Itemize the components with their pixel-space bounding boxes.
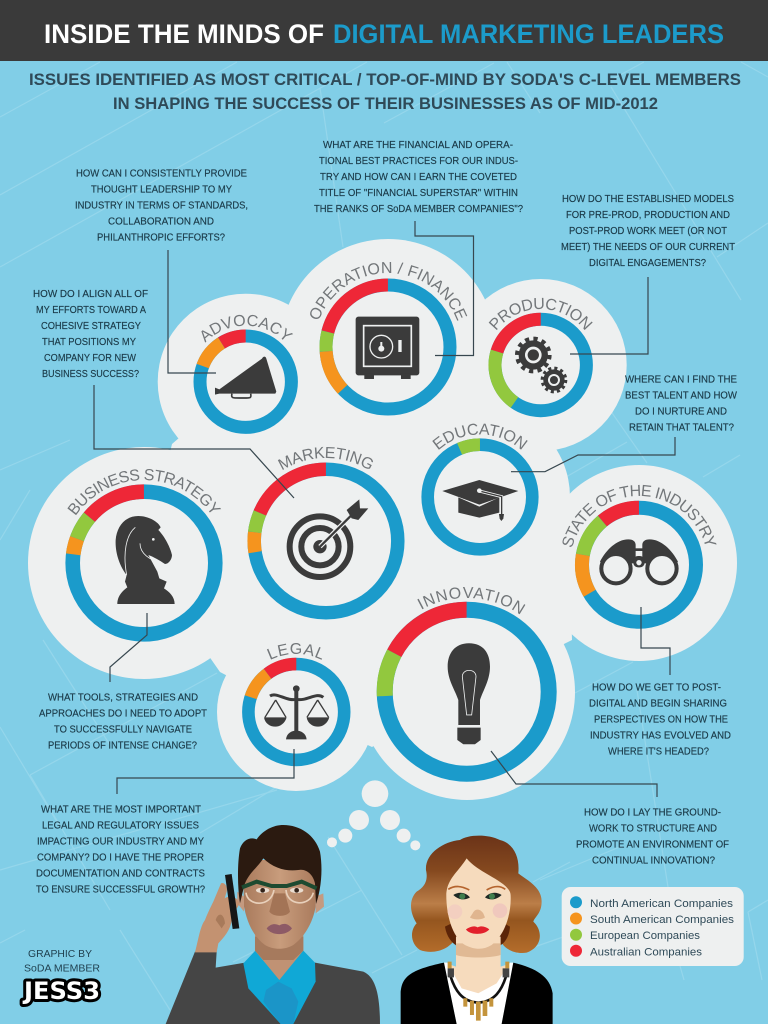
question: innovation: WORK TO STRUCTURE AND — [589, 824, 717, 834]
label: marketing: MARKETING — [278, 446, 373, 470]
subtitle: IN SHAPING THE SUCCESS OF THEIR BUSINESSES AS OF MID-2012 — [113, 95, 658, 113]
question: operation / finance: WHAT ARE THE FINANCIAL AND OPERA- — [323, 140, 513, 151]
question: production: POST-PROD WORK MEET (OR NOT — [569, 226, 727, 237]
question: advocacy — [75, 168, 248, 244]
question: operation / finance: TIONAL BEST PRACTICES FOR OUR INDUS- — [319, 156, 518, 167]
title: DIGITAL MARKETING LEADERS — [333, 19, 724, 49]
question: innovation: CONTINUAL INNOVATION? — [592, 856, 716, 866]
icon: target with arrow — [290, 499, 368, 577]
question: state of the industry: WHERE IT'S HEADED? — [608, 746, 710, 758]
icon: safe — [356, 317, 419, 379]
legend item: european: European Companies — [590, 930, 701, 942]
logo: JESS3: JESS3 — [22, 977, 100, 1005]
question: business strategy: TO SUCCESSFULLY NAVIGATE — [54, 724, 192, 736]
question: marketing: HOW DO I ALIGN ALL OF — [33, 289, 148, 300]
icon: graduation cap — [442, 480, 518, 521]
question: business strategy: PERIODS OF INTENSE CHANGE? — [48, 740, 198, 752]
question: education: WHERE CAN I FIND THE — [625, 374, 737, 386]
question: legal: LEGAL AND REGULATORY ISSUES — [42, 820, 199, 832]
question: marketing: BUSINESS SUCCESS? — [42, 369, 140, 380]
illustration: woman — [401, 836, 553, 1024]
question: production — [561, 194, 735, 269]
icon: light bulb — [448, 643, 490, 744]
question: education: RETAIN THAT TALENT? — [629, 422, 735, 434]
header bar — [0, 0, 768, 61]
subtitle: ISSUES IDENTIFIED AS MOST CRITICAL / TOP-OF-MIND BY SODA'S C-LEVEL MEMBERS — [29, 71, 741, 89]
label: legal: LEGAL — [267, 643, 322, 660]
question: innovation — [576, 808, 729, 866]
label: operation / finance: OPERATION / FINANCE — [310, 262, 468, 321]
question: education: DO I NURTURE AND — [635, 406, 727, 418]
question: legal: TO ENSURE SUCCESSFUL GROWTH? — [36, 884, 206, 896]
question: education: BEST TALENT AND HOW — [625, 390, 738, 402]
topic: advocacy — [194, 314, 298, 434]
question: operation / finance: THE RANKS OF SoDA MEMBER COMPANIES"? — [314, 204, 524, 215]
illustration: man on phone — [166, 825, 380, 1024]
thought bubbles — [327, 780, 420, 850]
label: education: EDUCATION — [432, 424, 528, 450]
label: business strategy: BUSINESS STRATEGY — [68, 469, 221, 515]
question: state of the industry: DIGITAL AND BEGIN SHARING — [589, 698, 727, 710]
topic: innovation — [376, 587, 557, 782]
question: state of the industry: PERSPECTIVES ON HOW THE — [594, 714, 728, 726]
question: business strategy: WHAT TOOLS, STRATEGIES AND — [48, 692, 198, 704]
icon: gears — [518, 339, 565, 391]
question: marketing: THAT POSITIONS MY — [42, 337, 136, 348]
question: state of the industry: HOW DO WE GET TO POST- — [592, 682, 721, 694]
question: operation / finance: TITLE OF "FINANCIAL SUPERSTAR" WITHIN — [319, 188, 518, 199]
question: advocacy: PHILANTHROPIC EFFORTS? — [97, 232, 226, 244]
icon: binoculars — [600, 539, 678, 583]
question: advocacy: THOUGHT LEADERSHIP TO MY — [91, 184, 232, 196]
question: operation / finance — [314, 140, 524, 215]
question: legal — [36, 804, 206, 896]
topic: production — [488, 298, 593, 418]
legend item: south american: South American Companies — [590, 914, 735, 926]
credit — [22, 948, 100, 1005]
question: production: MEET) THE NEEDS OF OUR CURRENT — [561, 242, 735, 253]
icon: megaphone — [215, 357, 276, 398]
label: advocacy: ADVOCACY — [202, 314, 293, 342]
question: state of the industry — [589, 682, 731, 758]
question: legal: COMPANY? DO I HAVE THE PROPER — [37, 852, 204, 864]
topic: marketing — [247, 446, 405, 620]
question: advocacy: COLLABORATION AND — [108, 216, 214, 228]
label: production: PRODUCTION — [488, 298, 592, 330]
question: marketing — [33, 289, 148, 380]
topic: legal — [242, 643, 350, 766]
question: marketing: MY EFFORTS TOWARD A — [36, 305, 146, 316]
question: advocacy: HOW CAN I CONSISTENTLY PROVIDE — [76, 168, 247, 180]
topic: education — [421, 424, 539, 556]
topic: state of the industry — [562, 484, 716, 629]
label: state of the industry: STATE OF THE INDUSTRY — [562, 484, 716, 547]
question: production: FOR PRE-PROD, PRODUCTION AND — [566, 210, 730, 221]
question: legal: WHAT ARE THE MOST IMPORTANT — [41, 804, 201, 816]
legend item: australian: Australian Companies — [590, 946, 703, 958]
label: innovation: INNOVATION — [417, 587, 526, 614]
question: innovation: PROMOTE AN ENVIRONMENT OF — [576, 840, 729, 850]
question: legal: DOCUMENTATION AND CONTRACTS — [36, 868, 205, 880]
question: business strategy: APPROACHES DO I NEED TO ADOPT — [39, 708, 207, 720]
topic: operation / finance — [310, 262, 468, 416]
question: production: HOW DO THE ESTABLISHED MODELS — [562, 194, 734, 205]
title: INSIDE THE MINDS OF — [44, 19, 324, 49]
question: production: DIGITAL ENGAGEMENTS? — [589, 258, 707, 269]
question: innovation: HOW DO I LAY THE GROUND- — [584, 808, 721, 818]
icon: scales of justice — [264, 685, 329, 739]
question: education — [625, 374, 738, 434]
question: legal: IMPACTING OUR INDUSTRY AND MY — [37, 836, 204, 848]
legend item: north american: North American Companies — [590, 898, 734, 910]
question: business strategy — [39, 692, 207, 752]
credit: GRAPHIC BY — [28, 948, 92, 960]
topic: business strategy — [65, 469, 223, 642]
connector lines — [94, 221, 675, 797]
legend — [562, 887, 744, 966]
question: marketing: COHESIVE STRATEGY — [41, 321, 141, 332]
question: state of the industry: INDUSTRY HAS EVOLVED AND — [590, 730, 731, 742]
credit: SoDA MEMBER — [24, 962, 100, 974]
subtitle — [29, 71, 741, 113]
question: advocacy: INDUSTRY IN TERMS OF STANDARDS, — [75, 200, 248, 212]
cloud of topics — [28, 239, 737, 800]
question: marketing: COMPANY FOR NEW — [44, 353, 137, 364]
question: operation / finance: TRY AND HOW CAN I EARN THE COVETED — [320, 172, 517, 183]
icon: chess knight — [116, 516, 175, 604]
